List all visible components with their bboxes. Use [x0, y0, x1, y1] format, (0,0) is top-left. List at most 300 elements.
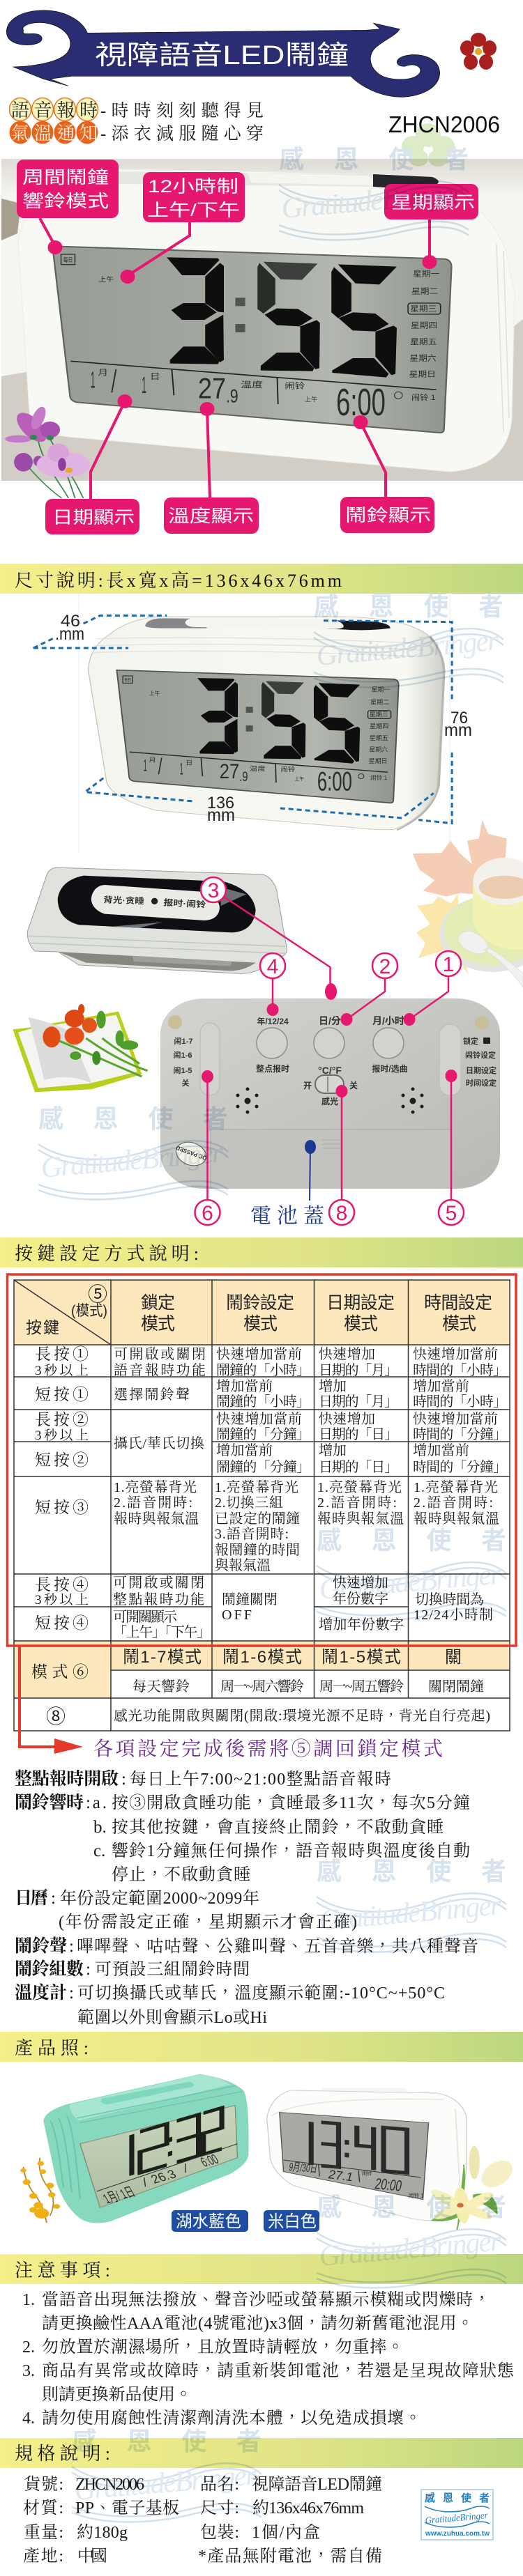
watermark 5: 感恩使者	[317, 1857, 506, 1885]
note: hourly announcement: :	[121, 1770, 126, 1789]
callout: 12 hour format: 上午/下午	[147, 201, 240, 220]
callout: weekly alarm mode	[17, 160, 119, 218]
table header: 時間設定	[424, 1293, 492, 1313]
row: short press 3: 已設定的鬧鐘	[215, 1511, 300, 1527]
callout: alarm display	[340, 497, 434, 533]
panel labels: 闹1-7	[174, 1037, 192, 1046]
photo: ivory white clock	[267, 2088, 467, 2221]
QC sticker	[172, 1138, 210, 1170]
row: mode 6: 鬧1-6模式	[222, 1648, 302, 1667]
lcd screen: front clock: 1	[142, 372, 146, 398]
tea cup and maple leaves decoration	[413, 820, 523, 987]
row: sensor 8: ⑧	[46, 1706, 66, 1727]
lcd screen: dimension clock: 1	[180, 760, 183, 778]
watermark 7	[72, 2427, 262, 2522]
table grid	[14, 1280, 510, 1731]
photo: ivory white clock: 9月/30日	[288, 2161, 318, 2175]
row: short press 4: 「上午」「下午」	[113, 1624, 211, 1640]
number 8: 8	[336, 1202, 347, 1225]
section heading: specifications	[0, 2438, 523, 2468]
row: long press 2: 快速增加當前	[216, 1411, 302, 1427]
callout: weekly alarm mode: 周間鬧鐘	[22, 168, 109, 187]
table header: 鬧鈴設定	[226, 1293, 294, 1313]
dimension label: 46 mm: 46	[61, 612, 80, 631]
note: calendar: (年份需設定正確，星期顯示才會正確)	[59, 1913, 357, 1931]
lcd screen: front clock	[52, 246, 451, 433]
table header: 模式	[344, 1314, 378, 1334]
row: short press 1: 增加當前	[216, 1378, 273, 1394]
lcd screen: dimension clock: 星期日	[369, 758, 388, 764]
row: short press 3: 2.語音開時:	[414, 1495, 493, 1511]
lcd screen: front clock: 闹铃 1	[411, 393, 435, 402]
watermark 4	[317, 1526, 506, 1621]
dimension label: 76 mm: mm	[444, 720, 472, 740]
row: short press 3: 1.亮螢幕背光	[215, 1479, 298, 1495]
lcd screen: front clock: 上午	[98, 275, 114, 284]
specifications list: 1個/內盒	[252, 2523, 320, 2542]
note: alarm sounds: 鬧鈴聲	[15, 1936, 67, 1956]
note: hourly announcement: 整點報時開啟	[15, 1769, 119, 1789]
row: short press 1: 選擇鬧鈴聲	[114, 1387, 190, 1403]
note: alarm ringing: 按其他按鍵，會直接終止鬧鈴，不啟動貪睡	[112, 1818, 444, 1837]
note: alarm ringing: 停止，不啟動貪睡	[112, 1865, 250, 1884]
row: short press 1: 增加當前	[413, 1378, 469, 1394]
section heading: product photos: 產品照:	[15, 2038, 89, 2058]
color tag: lake blue: 湖水藍色	[176, 2212, 241, 2231]
row: long press 4: 可開啟或關閉	[113, 1575, 204, 1591]
lcd screen: dimension clock: 27	[220, 759, 239, 783]
section heading: button settings	[0, 1237, 523, 1267]
panel labels: 报时/选曲	[372, 1064, 408, 1074]
lcd screen: front clock: 星期五	[410, 338, 437, 346]
speaker holes	[236, 1087, 424, 1113]
reminder text: 各項設定完成後需將⑤調回鎖定模式	[93, 1738, 443, 1760]
lcd screen: dimension clock: 每日	[124, 677, 131, 683]
lcd screen: dimension clock: 闹铃 1	[370, 773, 388, 781]
row: sensor 8	[46, 1706, 490, 1727]
specifications list: 視障語音LED鬧鐘	[252, 2475, 382, 2494]
lcd screen: front clock: 星期二	[411, 287, 438, 295]
row: long press 2: 快速增加當前	[413, 1411, 498, 1427]
row: long press 1: 鬧鐘的「小時」	[216, 1362, 310, 1378]
note 3: 商品有異常或故障時，請重新裝卸電池，若還是呈現故障狀態	[42, 2361, 515, 2380]
row: long press 1: 日期的「月」	[319, 1362, 398, 1378]
row: short press 2: 短按②	[35, 1451, 89, 1469]
dimension label: 76 mm	[444, 709, 472, 740]
watermark 5: GratitudeBringer	[318, 1889, 503, 1937]
photo: aqua blue clock: 1月/ 1日	[100, 2184, 138, 2207]
row: long press 4: 鬧鐘關閉	[222, 1591, 278, 1607]
panel labels: 锁定	[463, 1036, 478, 1046]
row: short press 3	[35, 1479, 499, 1573]
lcd screen: dimension clock: 星期三	[370, 711, 388, 718]
note 3	[22, 2361, 515, 2404]
lcd screen: front clock: 日	[150, 372, 160, 381]
row: long press 2	[35, 1411, 507, 1451]
lcd screen: front clock: 温度	[241, 380, 263, 390]
lcd screen: dimension clock: 星期六	[369, 746, 388, 753]
row: short press 3: 2.語音開時:	[317, 1495, 397, 1511]
row: short press 4	[35, 1609, 404, 1640]
note: calendar: 日曆	[15, 1888, 49, 1908]
section heading: specifications: 規格說明:	[15, 2444, 110, 2464]
row: long press 1: 時間的「小時」	[413, 1362, 507, 1378]
number 6	[195, 1200, 220, 1225]
row: long press 2: 日期的「日」	[319, 1426, 398, 1442]
section heading: button settings: 按鍵設定方式說明:	[15, 1244, 199, 1264]
note: alarm groups: 鬧鈴組數	[15, 1959, 84, 1979]
lcd screen: dimension clock: 月	[149, 757, 156, 763]
note: alarm ringing: b.	[93, 1818, 107, 1837]
row: short press 2: 日期的「日」	[319, 1459, 398, 1475]
specifications list: 約136x46x76mm	[252, 2499, 364, 2517]
section heading: dimensions	[0, 564, 523, 594]
specifications list: 包裝:	[200, 2523, 239, 2542]
photo: aqua blue clock: 26.3	[149, 2167, 179, 2186]
photo: aqua blue clock: 6:00	[198, 2152, 222, 2170]
note: calendar: 年份設定範圍2000~2099年	[60, 1889, 259, 1908]
table header: 鎖定	[141, 1293, 175, 1313]
section heading: product photos	[0, 2032, 523, 2062]
number 2	[372, 953, 397, 978]
note: hourly announcement	[15, 1769, 391, 1789]
note: alarm groups: 可預設三組鬧鈴時間	[95, 1960, 250, 1979]
photo: clock top view: 背光·贪睡	[103, 894, 144, 906]
row: long press 4: 快速增加	[333, 1575, 388, 1591]
watermark 2	[314, 592, 503, 688]
lcd screen: dimension clock: 闹铃	[281, 766, 295, 773]
number 3: 3	[208, 879, 219, 902]
note 2: 勿放置於潮濕場所，且放置時請輕放，勿重摔。	[42, 2338, 404, 2357]
lcd screen: dimension clock	[116, 670, 399, 803]
model number: ZHCN2006	[388, 111, 500, 137]
watermark 6	[317, 2193, 506, 2288]
lcd screen: dimension clock: 星期一	[371, 686, 390, 693]
lcd screen: front clock: 6:00	[336, 380, 386, 424]
panel labels: 年/12/24	[257, 1016, 289, 1026]
lcd screen: dimension clock: 上午	[295, 776, 304, 782]
photo: ivory white clock: 闹铃 1	[409, 2192, 424, 2199]
row: short press 4: 短按④	[35, 1614, 89, 1632]
watermark 7: 感恩使者	[72, 2427, 262, 2455]
number 3	[201, 877, 226, 902]
dimension label: 136 mm: 136	[207, 794, 234, 812]
row: short press 2	[35, 1442, 507, 1475]
watermark 3	[38, 1104, 228, 1200]
specifications list: 約180g	[77, 2523, 128, 2542]
lcd screen: dimension clock: 星期四	[370, 723, 388, 730]
note: thermometer: 溫度計	[15, 1982, 67, 2003]
dimension label: 136 mm	[207, 794, 235, 825]
note: thermometer: 範圍以外則會顯示Lo或Hi	[77, 2008, 267, 2027]
lcd screen: dimension clock: 日	[185, 759, 192, 766]
watermark 1 with green flower	[279, 123, 469, 240]
table header: 模式	[243, 1314, 278, 1334]
number 5: 5	[446, 1202, 457, 1225]
number 8	[329, 1200, 354, 1225]
feature line: temperature notice: -添衣減服隨心穿	[100, 124, 264, 144]
row: mode 6: 周一~周五響鈴	[319, 1679, 404, 1695]
row: short press 1	[35, 1378, 507, 1410]
dimension label: 46 mm	[55, 612, 84, 644]
table header	[26, 1283, 492, 1336]
row: mode 6: 關閉鬧鐘	[428, 1679, 484, 1695]
number 1	[436, 951, 461, 976]
note: alarm ringing: 響鈴1分鐘無任何操作，語音報時與溫度後自動	[112, 1842, 470, 1860]
row: short press 2: 時間的「分鐘」	[413, 1459, 507, 1475]
row: short press 4: 增加年份數字	[319, 1617, 404, 1633]
note 1: 請更換鹼性AAA電池(4號電池)x3個，請勿新舊電池混用。	[42, 2314, 473, 2333]
callout: date display	[45, 499, 139, 534]
section heading: notes: 注意事項:	[15, 2260, 110, 2281]
row: long press 1: 快速增加當前	[216, 1346, 302, 1362]
note: alarm ringing: :a.	[86, 1794, 107, 1812]
row: long press 4: 整點報時功能	[113, 1591, 204, 1607]
row: short press 1: 增加	[319, 1378, 347, 1394]
note: thermometer: 可切換攝氏或華氏，溫度顯示範圍:-10°C~+50°C	[77, 1984, 445, 2003]
row: short press 3: 1.亮螢幕背光	[414, 1479, 498, 1495]
lcd screen: dimension clock: 星期五	[370, 734, 388, 741]
row: sensor 8: 感光功能開啟與關閉(開啟:環境光源不足時，背光自行亮起)	[114, 1708, 490, 1724]
photo: aqua blue clock	[43, 2074, 249, 2223]
number 1: 1	[443, 953, 454, 976]
photo: clock with dimensions	[79, 592, 450, 853]
row: short press 3: 報時與報氣溫	[317, 1511, 404, 1527]
photo: clock top view	[27, 867, 287, 973]
lcd screen: dimension clock: 星期二	[370, 699, 389, 705]
section heading: dimensions: 尺寸說明:長x寬x高=136x46x76mm	[15, 571, 342, 591]
left and right sliders	[200, 1023, 461, 1095]
note 1	[22, 2290, 490, 2333]
watermark 6: GratitudeBringer	[318, 2225, 503, 2273]
lcd big digits illustration	[167, 257, 397, 378]
feature notes	[15, 1769, 478, 2027]
note: thermometer: :	[69, 1984, 74, 2003]
callout: temperature display	[164, 498, 259, 534]
row: short press 1: 短按①	[35, 1386, 89, 1403]
dimension label: 76 mm: 76	[450, 709, 468, 727]
watermark 2: 感恩使者	[314, 592, 503, 621]
watermark 4: GratitudeBringer	[318, 1558, 503, 1606]
row: long press 1: 快速增加當前	[413, 1346, 498, 1362]
callout: weekly alarm mode: 響鈴模式	[22, 192, 109, 211]
number 2: 2	[379, 955, 391, 978]
callout: weekday display: 星期顯示	[391, 193, 475, 213]
note: alarm ringing: 按③開啟貪睡功能，貪睡最多11次，每次5分鐘	[112, 1794, 470, 1812]
settings table	[14, 1280, 510, 1731]
row: long press 1: 快速增加	[319, 1346, 375, 1362]
panel labels: 闹1-5	[174, 1066, 192, 1075]
panel labels: 感光	[321, 1096, 338, 1106]
note 1: 1.	[22, 2291, 35, 2309]
photo: clock front with callouts	[1, 159, 523, 481]
watermark 1 with green flower: 感恩使者	[279, 145, 469, 173]
lcd screen: front clock: 闹铃	[285, 380, 305, 390]
photo: clock top view: 报时·闹铃	[163, 897, 206, 909]
row: long press 1: 長按①	[35, 1345, 89, 1363]
row: long press 4	[35, 1575, 493, 1623]
panel labels: 关	[181, 1078, 190, 1088]
row: short press 4: 可開關顯示	[113, 1609, 178, 1625]
section heading: notes	[0, 2254, 523, 2284]
row: short press 3: 與報氣溫	[215, 1557, 271, 1573]
row: long press 4: OFF	[222, 1607, 252, 1623]
panel labels: 闹铃设定	[465, 1050, 496, 1060]
lcd screen: front clock: 每日	[63, 256, 73, 263]
callout: date display: 日期顯示	[52, 508, 135, 527]
feature line: temperature notice	[10, 121, 264, 144]
watermark 4: 感恩使者	[317, 1526, 506, 1555]
number 4: 4	[267, 955, 278, 978]
note: alarm ringing: 鬧鈴響時	[15, 1793, 84, 1812]
callout leader lines and dots	[40, 218, 437, 499]
row: long press 4: 3秒以上	[35, 1592, 89, 1607]
lcd screen: front clock: 上午	[305, 396, 317, 403]
number 5	[439, 1200, 464, 1225]
lily decoration	[427, 2145, 519, 2230]
brand logo: GratitudeBringer	[425, 2511, 489, 2527]
table header: 模式	[442, 1314, 476, 1334]
lcd screen: front clock: 月	[98, 368, 108, 377]
row: long press 1	[35, 1345, 507, 1378]
panel labels	[174, 1015, 497, 1106]
lcd screen: front clock: 星期四	[411, 321, 437, 330]
specifications list: 產地:	[23, 2547, 63, 2566]
note: calendar: :	[51, 1889, 56, 1908]
row: long press 1: 語音報時功能	[114, 1362, 206, 1378]
row: long press 4: 長按④	[35, 1576, 89, 1594]
table header: 按鍵	[26, 1318, 59, 1336]
note: alarm sounds: :	[69, 1937, 74, 1956]
specifications list: 中國	[77, 2547, 107, 2566]
dimension label: 46 mm: .mm	[55, 624, 84, 644]
note 1: 當語音出現無法撥放、聲音沙啞或螢幕顯示模糊或閃爍時，	[42, 2290, 490, 2309]
row: short press 3: 1.亮螢幕背光	[114, 1479, 197, 1495]
title banner: 視障語音LED鬧鐘	[95, 41, 349, 70]
lcd screen: front clock: 1	[91, 367, 96, 393]
dimension label: 136 mm: mm	[207, 805, 235, 825]
photo: clock back panel	[160, 998, 500, 1189]
row: short press 3: 3.語音開時:	[215, 1526, 289, 1542]
specifications list	[23, 2475, 382, 2566]
row: mode 6: 模式⑥	[31, 1663, 89, 1681]
cosmos flower decoration	[5, 406, 90, 498]
QC sticker: QC PASSED	[175, 1144, 208, 1162]
lcd screen: front clock: 27	[198, 372, 226, 405]
row: short press 1: 時間的「小時」	[413, 1394, 507, 1410]
panel labels: 开	[303, 1081, 312, 1090]
row: short press 3: 2.語音開時:	[114, 1495, 192, 1511]
row: short press 3: 短按③	[35, 1499, 89, 1516]
panel labels: 关	[349, 1080, 358, 1090]
feature line: voice announcement: -時時刻刻聽得見	[100, 101, 264, 121]
note 4: 4.	[22, 2409, 35, 2428]
callout: alarm display: 鬧鈴顯示	[345, 506, 431, 525]
lcd screen: dimension clock: 温度	[250, 765, 266, 772]
yellow blossom decoration	[20, 2158, 60, 2223]
button number callouts	[195, 877, 464, 1225]
brand logo: 感恩使者	[425, 2492, 490, 2504]
table header: 模式	[141, 1314, 175, 1334]
photo: ivory white clock: 20:00	[374, 2175, 404, 2194]
dimension dashed lines	[33, 615, 452, 824]
panel labels: °C/°F	[318, 1065, 342, 1076]
notes list	[22, 2290, 515, 2428]
row: long press 2: 鬧鐘的「分鐘」	[216, 1426, 310, 1442]
feature line: voice announcement: 語音報時	[11, 100, 98, 121]
table header: ⑤	[88, 1283, 107, 1305]
lcd screen: front clock: 星期日	[409, 370, 436, 378]
row: long press 2: 時間的「分鐘」	[413, 1426, 507, 1442]
specifications list: 品名:	[200, 2475, 239, 2494]
row: short press 3: 1.亮螢幕背光	[317, 1479, 402, 1495]
lcd screen: front clock: 星期六	[409, 354, 437, 362]
note: calendar	[15, 1888, 357, 1931]
red frame and arrow	[7, 1274, 516, 1754]
row: short press 3: 2.切換三組	[215, 1495, 283, 1511]
callout: 12 hour format	[143, 172, 245, 222]
note 2: 2.	[22, 2338, 35, 2357]
number 6: 6	[202, 1202, 213, 1225]
row: short press 1: 鬧鐘的「小時」	[216, 1394, 310, 1410]
callout: temperature display: 溫度顯示	[168, 507, 254, 526]
lcd screen: dimension clock: 6:00	[317, 766, 352, 796]
lcd screen: front clock: 星期一	[413, 270, 440, 278]
specifications list: 材質:	[23, 2499, 63, 2517]
feature line: temperature notice: 氣溫通知	[11, 123, 98, 144]
row: short press 2: 增加當前	[413, 1442, 469, 1458]
lcd screen: front clock: .9	[226, 386, 238, 407]
row: mode 6: 鬧1-5模式	[321, 1648, 401, 1667]
title banner	[7, 10, 439, 97]
panel labels: 整点报时	[256, 1063, 289, 1074]
note: alarm ringing	[15, 1793, 470, 1884]
specifications list: *產品無附電池，需自備	[198, 2547, 382, 2566]
specifications list: 尺寸:	[200, 2499, 239, 2517]
watermark 1 with green flower: GratitudeBringer	[280, 177, 466, 225]
row: short press 2: 鬧鐘的「分鐘」	[216, 1459, 310, 1475]
row: short press 2: 增加	[319, 1442, 347, 1458]
color tag: ivory white: 米白色	[268, 2212, 317, 2231]
row: long press 1: 可開啟或關閉	[114, 1346, 206, 1362]
watermark 2: GratitudeBringer	[315, 624, 501, 672]
specifications list: 貨號:	[24, 2475, 63, 2494]
row: long press 2: 3秒以上	[35, 1428, 89, 1443]
row: long press 4: 12/24小時制	[414, 1607, 493, 1623]
battery cover label	[250, 1140, 324, 1228]
row: mode 6: 每天響鈴	[132, 1679, 190, 1695]
lcd screen: dimension clock: 上午	[149, 690, 160, 697]
row: mode 6: 鬧1-7模式	[123, 1648, 202, 1667]
callout: 12 hour format: 12小時制	[148, 177, 238, 196]
specifications list: ZHCN2006	[75, 2476, 144, 2494]
panel labels: 月/小时	[372, 1015, 404, 1026]
row: long press 4: 切換時間為	[415, 1591, 484, 1607]
photo: ivory white clock: 27.1	[327, 2168, 355, 2184]
brand logo: www.zuhua.com.tw	[425, 2530, 490, 2538]
specifications list: 重量:	[24, 2523, 63, 2542]
row: short press 2: 增加當前	[216, 1442, 273, 1458]
watermark 3: 感恩使者	[38, 1104, 228, 1133]
book with roses decoration	[13, 1004, 148, 1092]
table cell fills	[14, 1280, 510, 1698]
panel labels: 日期设定	[466, 1065, 497, 1075]
row: short press 3: 報鬧鐘的時間	[215, 1542, 300, 1558]
row: mode 6: 關	[445, 1648, 462, 1667]
panel labels: 时间设定	[466, 1078, 497, 1088]
row: mode 6: 周一~周六響鈴	[220, 1679, 304, 1695]
photo: ivory white clock: 闹铃	[362, 2170, 372, 2177]
